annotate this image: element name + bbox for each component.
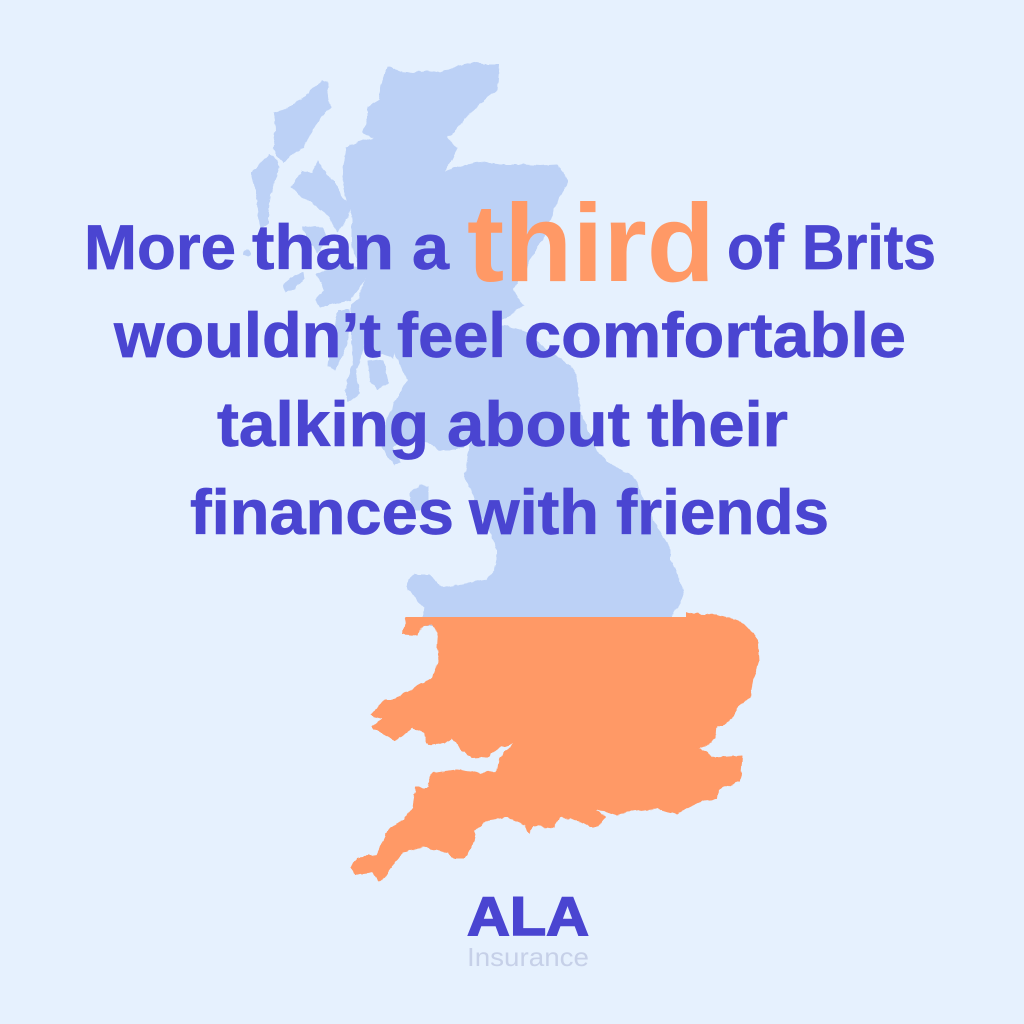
map: Tiree and Coll [283,273,304,292]
headline line 3: their [647,390,788,460]
map: Skye [292,162,350,232]
map: Arran [368,360,388,389]
map: Mull [316,265,367,307]
logo wordmark: ALA [467,885,589,947]
headline line 1: than [252,213,394,283]
map: Uists [252,155,279,227]
infographic canvas [88,62,934,966]
headline line 1 [84,182,936,305]
headline line 4: with [468,478,599,548]
logo: ALA Insurance [467,885,589,972]
map: Islay and Jura [328,310,350,370]
headline line 3: about [447,390,630,460]
headline line 4: friends [616,478,829,548]
logo subtitle: Insurance [467,942,589,972]
map: mainland north [343,63,683,625]
headline line 1: Brits [802,213,936,283]
map: Lewis and Harris [273,80,330,162]
headline [84,182,936,548]
map: small isles [303,227,327,252]
map: dot island [244,250,250,256]
map: Wales and southern England in orange [351,612,759,881]
headline line 2 [113,301,906,371]
headline line 1: third [467,182,715,305]
headline line 1: a [412,213,450,283]
headline line 2: wouldn’t [113,301,381,371]
headline line 4: finances [190,478,454,548]
headline line 2: comfortable [524,301,906,371]
headline line 4 [190,478,829,548]
headline line 2: feel [397,301,506,371]
map: Isle of Man [410,485,428,510]
map: Scotland and northern England in pale blue [244,63,683,625]
headline line 1: of [727,213,785,283]
headline line 3: talking [217,390,429,460]
headline line 1: More [84,213,236,283]
headline line 3 [217,390,788,460]
